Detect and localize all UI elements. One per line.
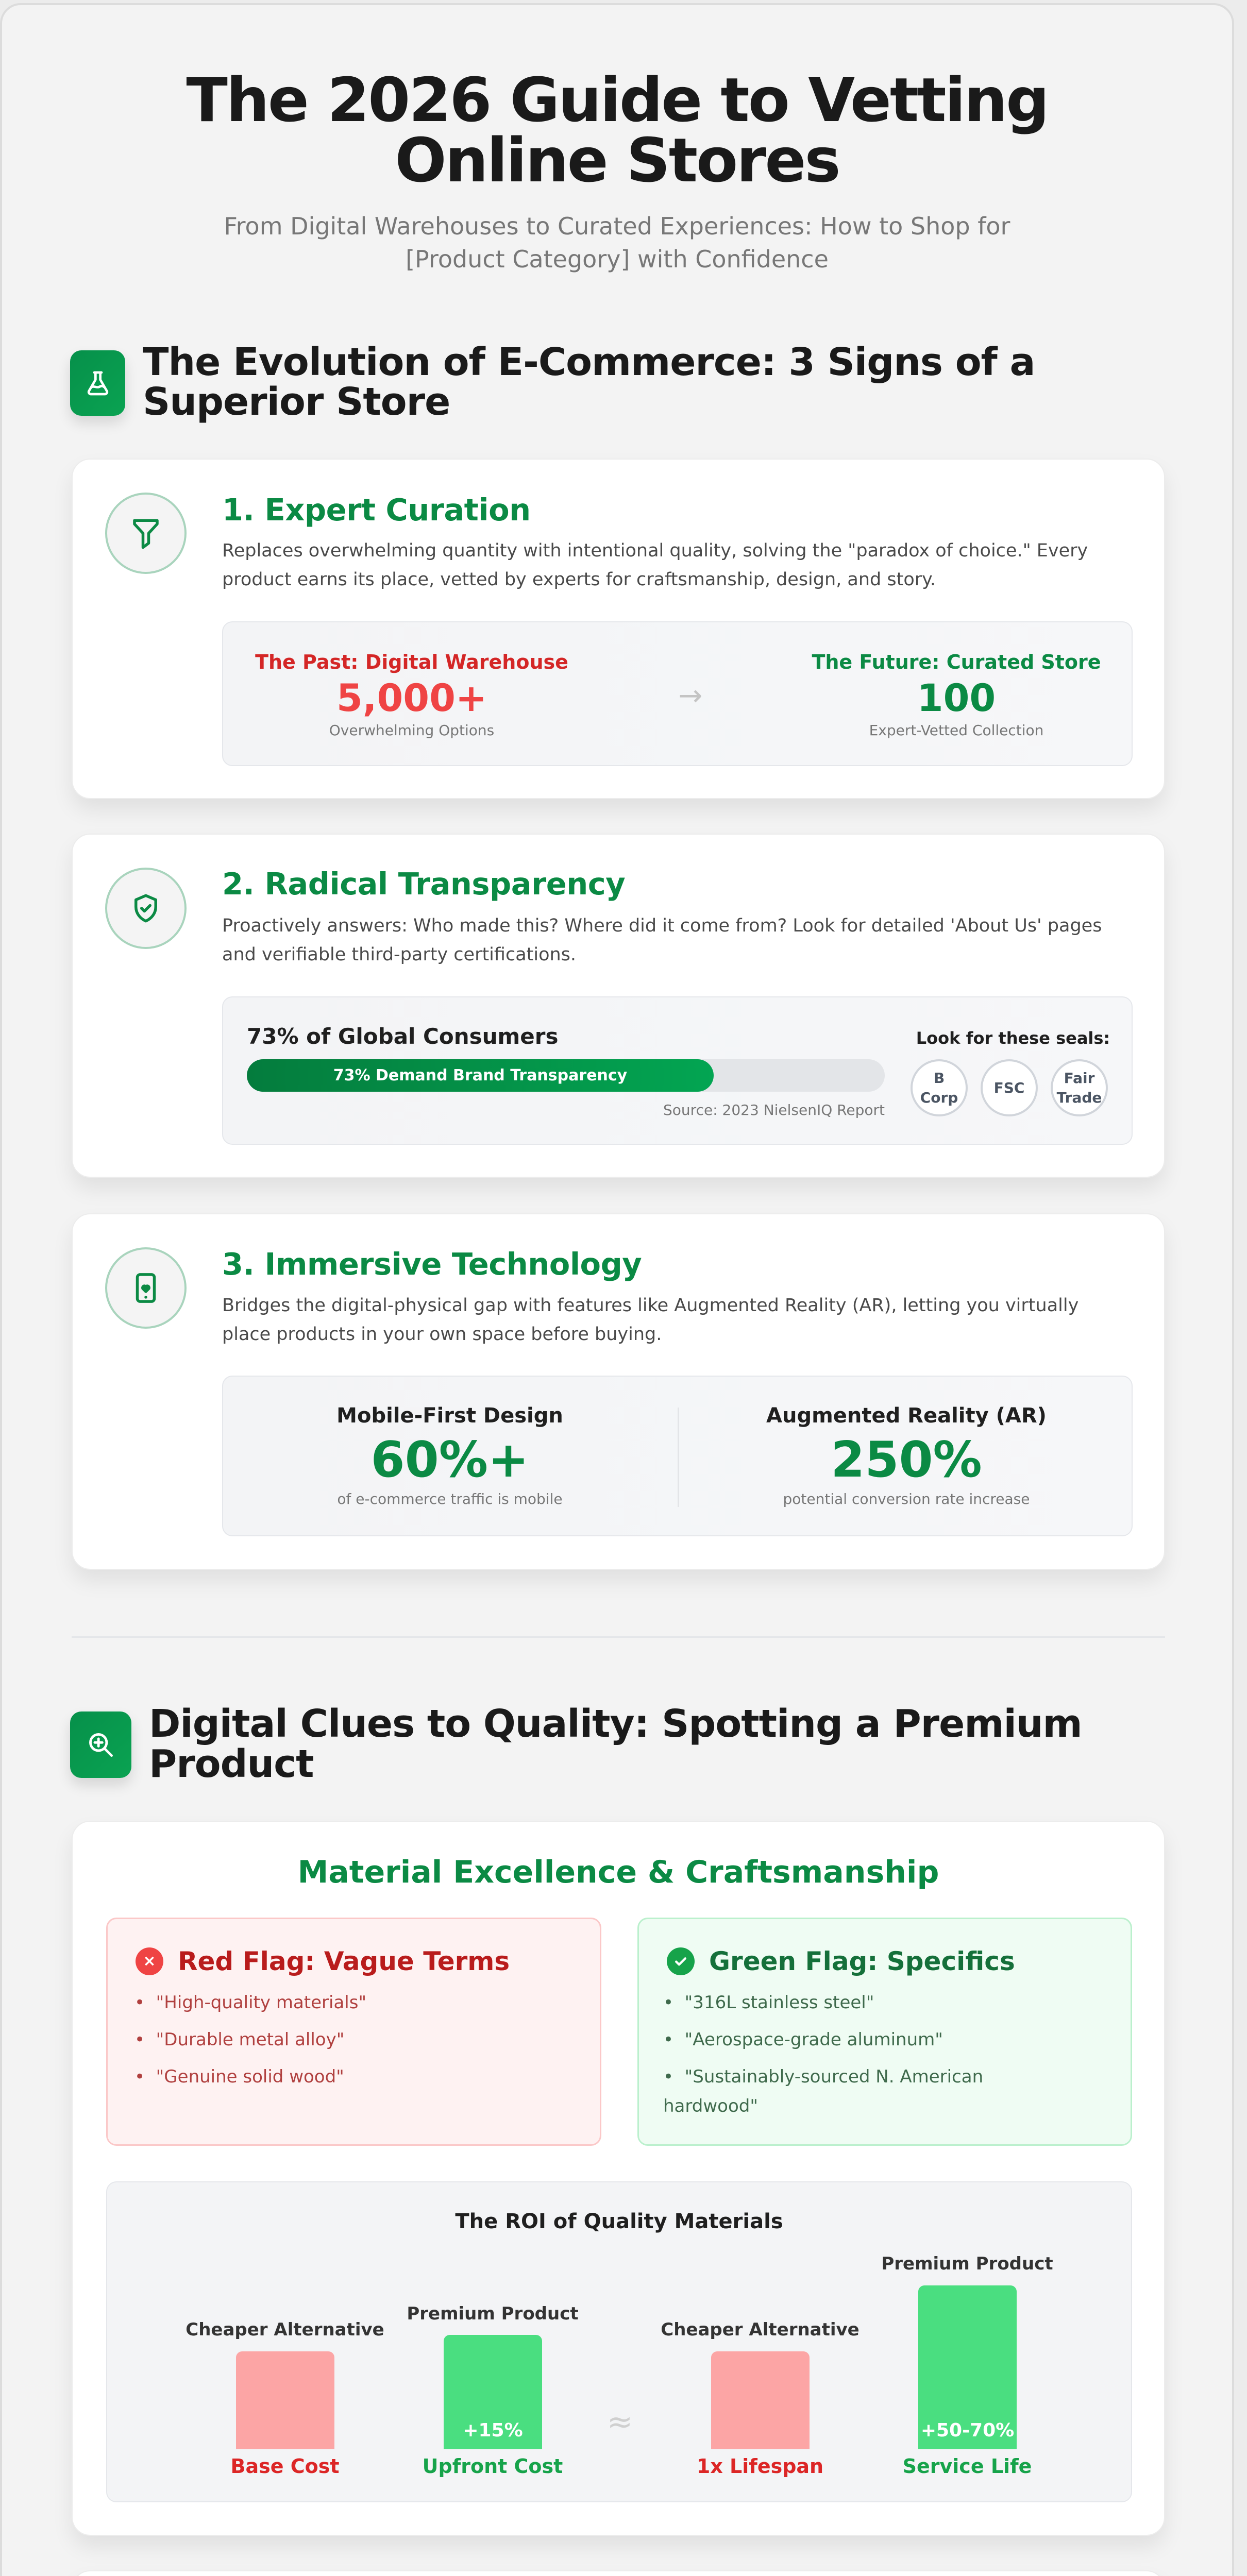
text: immersive: place products in your own space before buying.	[222, 1324, 662, 1345]
chart: ROI of quality materials: +50-70%	[921, 2420, 1014, 2441]
heading: section 2	[149, 1702, 1082, 1786]
title: The 2026 Guide to Vetting	[186, 64, 1048, 135]
list: specifics: • "316L stainless steel"	[663, 1992, 874, 2013]
panel: radical transparency	[72, 834, 1165, 1178]
list: specifics: • "Sustainably-sourced N. American	[663, 2066, 983, 2087]
chart: ROI of quality materials: Service Life	[903, 2455, 1032, 2478]
subtitle	[224, 212, 1010, 273]
icon: funnel	[105, 493, 187, 574]
stat: 73%: Source: 2023 NielsenIQ Report	[663, 1101, 885, 1118]
stat: 73%: 73% of Global Consumers	[247, 1024, 559, 1049]
seals: B	[934, 1070, 945, 1086]
seals: Corp	[920, 1089, 958, 1106]
stat: future	[812, 651, 1101, 739]
chart: ROI of quality materials: +15%	[463, 2420, 523, 2441]
seals: Look for these seals:	[916, 1028, 1110, 1048]
list: specifics: • "Aerospace-grade aluminum"	[663, 2029, 943, 2050]
stat: future: Expert-Vetted Collection	[869, 722, 1043, 739]
stats: mobile & AR: 250%	[831, 1432, 982, 1488]
approx sign: ≈	[607, 2404, 633, 2440]
list: vague terms	[134, 1992, 366, 2087]
panel: green flag	[637, 1918, 1132, 2146]
heading: section 2: Digital Clues to Quality: Spotting a Premium	[149, 1702, 1082, 1746]
title	[186, 64, 1048, 196]
stat: 73%	[222, 996, 1133, 1145]
stat: future: 100	[917, 676, 996, 720]
stats: mobile & AR: Augmented Reality (AR)	[766, 1404, 1047, 1428]
text: expert curation: Replaces overwhelming quantity with intentional quality, solving the "paradox of choice." Every	[222, 540, 1088, 561]
list: specifics	[663, 1992, 983, 2116]
icon: shield	[105, 868, 187, 949]
panel: green flag: Green Flag: Specifics	[709, 1946, 1015, 1976]
icon: x: ×	[143, 1952, 156, 1970]
icon: flask	[70, 350, 125, 416]
chart: ROI of quality materials: The ROI of Quality Materials	[455, 2210, 783, 2233]
icon: phone	[105, 1247, 187, 1329]
text: immersive: Bridges the digital-physical gap with features like Augmented Reality (AR), letting you virtually	[222, 1295, 1079, 1316]
list: vague terms: • "Durable metal alloy"	[134, 2029, 344, 2050]
panel: expert curation	[72, 459, 1165, 799]
stats: mobile & AR: potential conversion rate increase	[783, 1490, 1030, 1507]
heading: expert curation: 1. Expert Curation	[222, 492, 531, 528]
bar: cheaper base cost: Cheaper Alternative	[186, 2319, 384, 2340]
stat: future: The Future: Curated Store	[812, 651, 1101, 673]
stat: past: 5,000+	[336, 676, 487, 720]
seals: Trade	[1057, 1089, 1102, 1106]
text: transparency: Proactively answers: Who made this? Where did it come from? Look for detailed 'About Us' pages	[222, 916, 1102, 936]
heading: section 2: Product	[149, 1742, 313, 1786]
stats: mobile & AR: of e-commerce traffic is mobile	[337, 1490, 563, 1507]
text: transparency	[222, 916, 1102, 965]
arrow: →	[679, 679, 702, 713]
list: vague terms: • "High-quality materials"	[134, 1992, 366, 2013]
stat comparison	[222, 621, 1133, 766]
heading: immersive technology: 3. Immersive Technology	[222, 1246, 642, 1282]
text: expert curation	[222, 540, 1088, 590]
panel: red flag: Red Flag: Vague Terms	[178, 1946, 510, 1976]
stat: past: The Past: Digital Warehouse	[255, 651, 568, 673]
stat: past	[255, 651, 568, 739]
chart: ROI of quality materials: 1x Lifespan	[697, 2455, 823, 2478]
subtitle: [Product Category] with Confidence	[406, 245, 829, 273]
panel: red flag	[106, 1918, 601, 2146]
heading: section 1	[143, 340, 1035, 424]
stat: past: Overwhelming Options	[329, 722, 494, 739]
list: vague terms: • "Genuine solid wood"	[134, 2066, 344, 2087]
progress bar: 73% Demand Brand Transparency	[333, 1066, 627, 1084]
panel: PDP	[72, 2570, 1165, 2576]
text: immersive	[222, 1295, 1079, 1345]
list: specifics: hardwood"	[663, 2096, 758, 2116]
seals: FSC	[994, 1079, 1024, 1096]
panel: material excellence	[72, 1821, 1165, 2536]
stats: mobile & AR	[222, 1376, 1133, 1536]
heading: section 1: The Evolution of E-Commerce: 3 Signs of a	[143, 340, 1035, 384]
icon: x	[136, 1947, 163, 1975]
title: Online Stores	[395, 125, 839, 196]
chart: ROI of quality materials: Base Cost	[230, 2455, 339, 2478]
icon: check	[667, 1947, 695, 1975]
bar: cheaper lifespan: Cheaper Alternative	[661, 2319, 860, 2340]
stats: mobile & AR: Mobile-First Design	[336, 1404, 563, 1428]
subtitle: From Digital Warehouses to Curated Experiences: How to Shop for	[224, 212, 1010, 240]
text: transparency: and verifiable third-party certifications.	[222, 944, 576, 965]
stats: mobile & AR: 60%+	[371, 1432, 529, 1488]
seals: Fair	[1064, 1070, 1094, 1086]
bar: premium service life: Premium Product	[881, 2253, 1053, 2274]
icon: magnifier	[70, 1711, 131, 1778]
text: expert curation: product earns its place, vetted by experts for craftsmanship, design, and story.	[222, 569, 936, 590]
bar: premium upfront cost: Premium Product	[407, 2303, 579, 2324]
progress bar	[247, 1059, 885, 1092]
heading: section 1: Superior Store	[143, 380, 450, 424]
seals	[911, 1028, 1110, 1116]
chart: ROI of quality materials: Upfront Cost	[423, 2455, 563, 2478]
chart: ROI of quality materials	[106, 2181, 1132, 2502]
heading: material excellence: Material Excellence & Craftsmanship	[298, 1854, 939, 1890]
heading: radical transparency: 2. Radical Transparency	[222, 866, 625, 902]
panel: immersive technology	[72, 1213, 1165, 1570]
